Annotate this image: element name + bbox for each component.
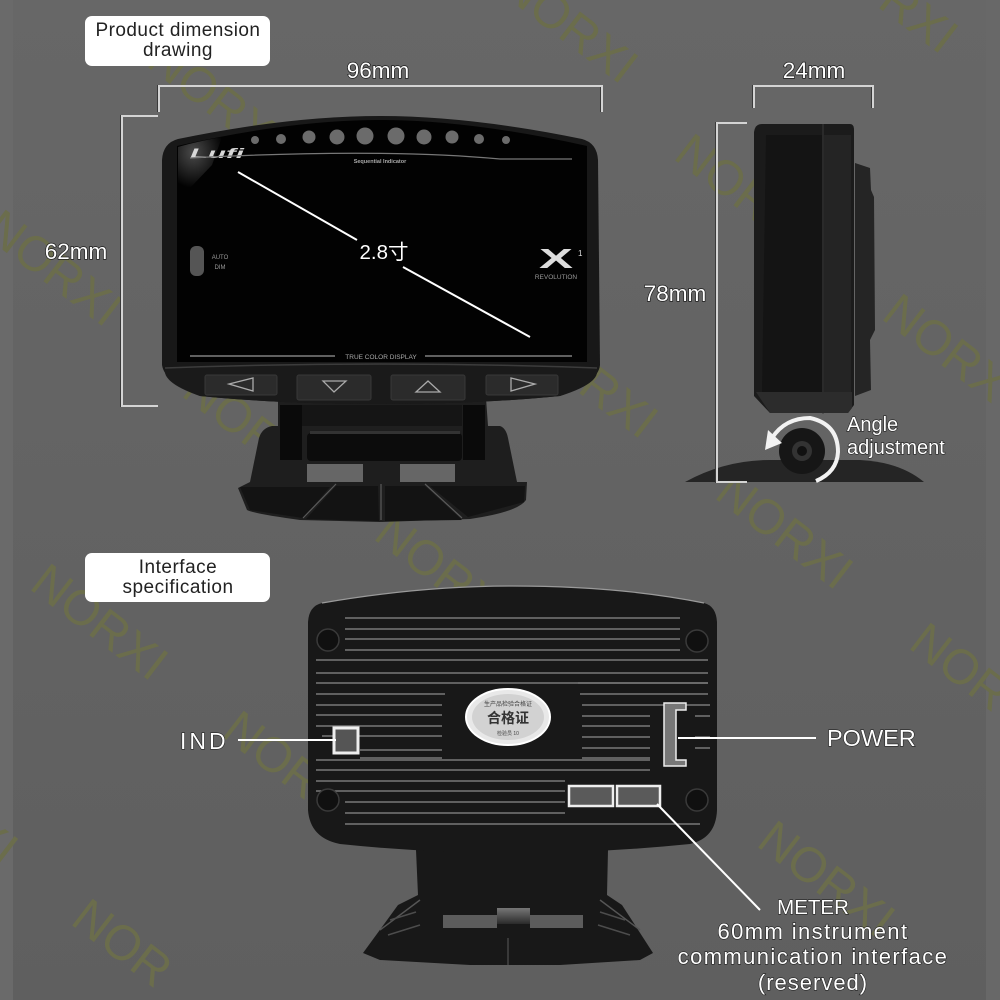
diagonal 2.8: 2.8寸 (360, 241, 408, 264)
X1 logo (535, 243, 583, 281)
watermarks: NORXI (748, 811, 904, 948)
heading: product dimension drawing: drawing (143, 40, 213, 61)
watermarks: NORXI (511, 312, 667, 449)
stand (238, 398, 527, 522)
screen (177, 120, 587, 362)
logo: Lufi (190, 145, 246, 161)
certificate sticker (466, 689, 550, 745)
callout: IND: IND (180, 728, 229, 754)
METER connectors (569, 786, 660, 806)
rear stand (363, 850, 653, 965)
callout: METER (657, 804, 948, 995)
IND connector (334, 728, 358, 753)
heading: interface specification (85, 553, 270, 602)
heading: interface specification: specification (122, 577, 234, 598)
dimension: 96mm width: 96mm (347, 58, 409, 83)
watermarks: NORXI (21, 554, 177, 691)
callout: METER: METER (777, 896, 849, 919)
POWER connector (664, 703, 686, 766)
certificate sticker: 生产品检验合格证 (484, 700, 532, 708)
angle adjustment label (847, 414, 945, 459)
dimension: 78mm height (644, 123, 747, 482)
X1 logo: REVOLUTION (535, 274, 577, 281)
watermarks: NORXI (665, 124, 821, 261)
device side view (685, 124, 924, 482)
dimension: 78mm height: 78mm (644, 281, 706, 306)
bottom label: TRUE COLOR DISPLAY (345, 354, 417, 361)
angle adjustment label: adjustment (847, 437, 945, 459)
indicator dots (251, 128, 510, 144)
watermarks: NOR (62, 889, 182, 998)
watermarks: NORXI (706, 463, 862, 600)
body (162, 116, 600, 404)
angle adjustment arrow (765, 418, 838, 481)
dimension: 62mm height (45, 116, 158, 406)
device front view: Sequential Indicator (354, 159, 407, 165)
device front view (162, 116, 600, 522)
buttons (165, 364, 597, 404)
watermarks: NORXI (173, 361, 329, 498)
X1 logo: X (539, 243, 574, 274)
auto dim (190, 246, 229, 276)
callout: METER: communication interface (678, 944, 948, 969)
diagonal 2.8 (238, 172, 530, 337)
housing (308, 586, 717, 853)
callout: POWER: POWER (827, 725, 916, 751)
angle adjustment label: Angle (847, 414, 898, 436)
dimension: 96mm width (159, 58, 602, 112)
heading: product dimension drawing: Product dimension (96, 20, 260, 41)
certificate sticker: 检验员 10 (497, 730, 519, 737)
auto dim: DIM (214, 265, 226, 271)
callout: METER: 60mm instrument (718, 919, 908, 944)
dimension: 62mm height: 62mm (45, 239, 107, 264)
callout: METER: (reserved) (758, 970, 868, 995)
dimension: 24mm width: 24mm (783, 58, 845, 83)
heading: product dimension drawing (85, 16, 270, 66)
watermarks: NORXI (365, 504, 521, 641)
dimension: 24mm width (754, 58, 873, 108)
watermarks: NORXI (213, 701, 369, 838)
X1 logo: 1 (578, 249, 583, 258)
heading: interface specification: Interface (139, 557, 217, 578)
device rear view (308, 586, 717, 965)
screws (317, 629, 708, 811)
watermarks: NORXI (138, 31, 294, 168)
auto dim: AUTO (212, 255, 229, 261)
certificate sticker: 合格证 (487, 710, 529, 726)
ribs (316, 618, 710, 824)
